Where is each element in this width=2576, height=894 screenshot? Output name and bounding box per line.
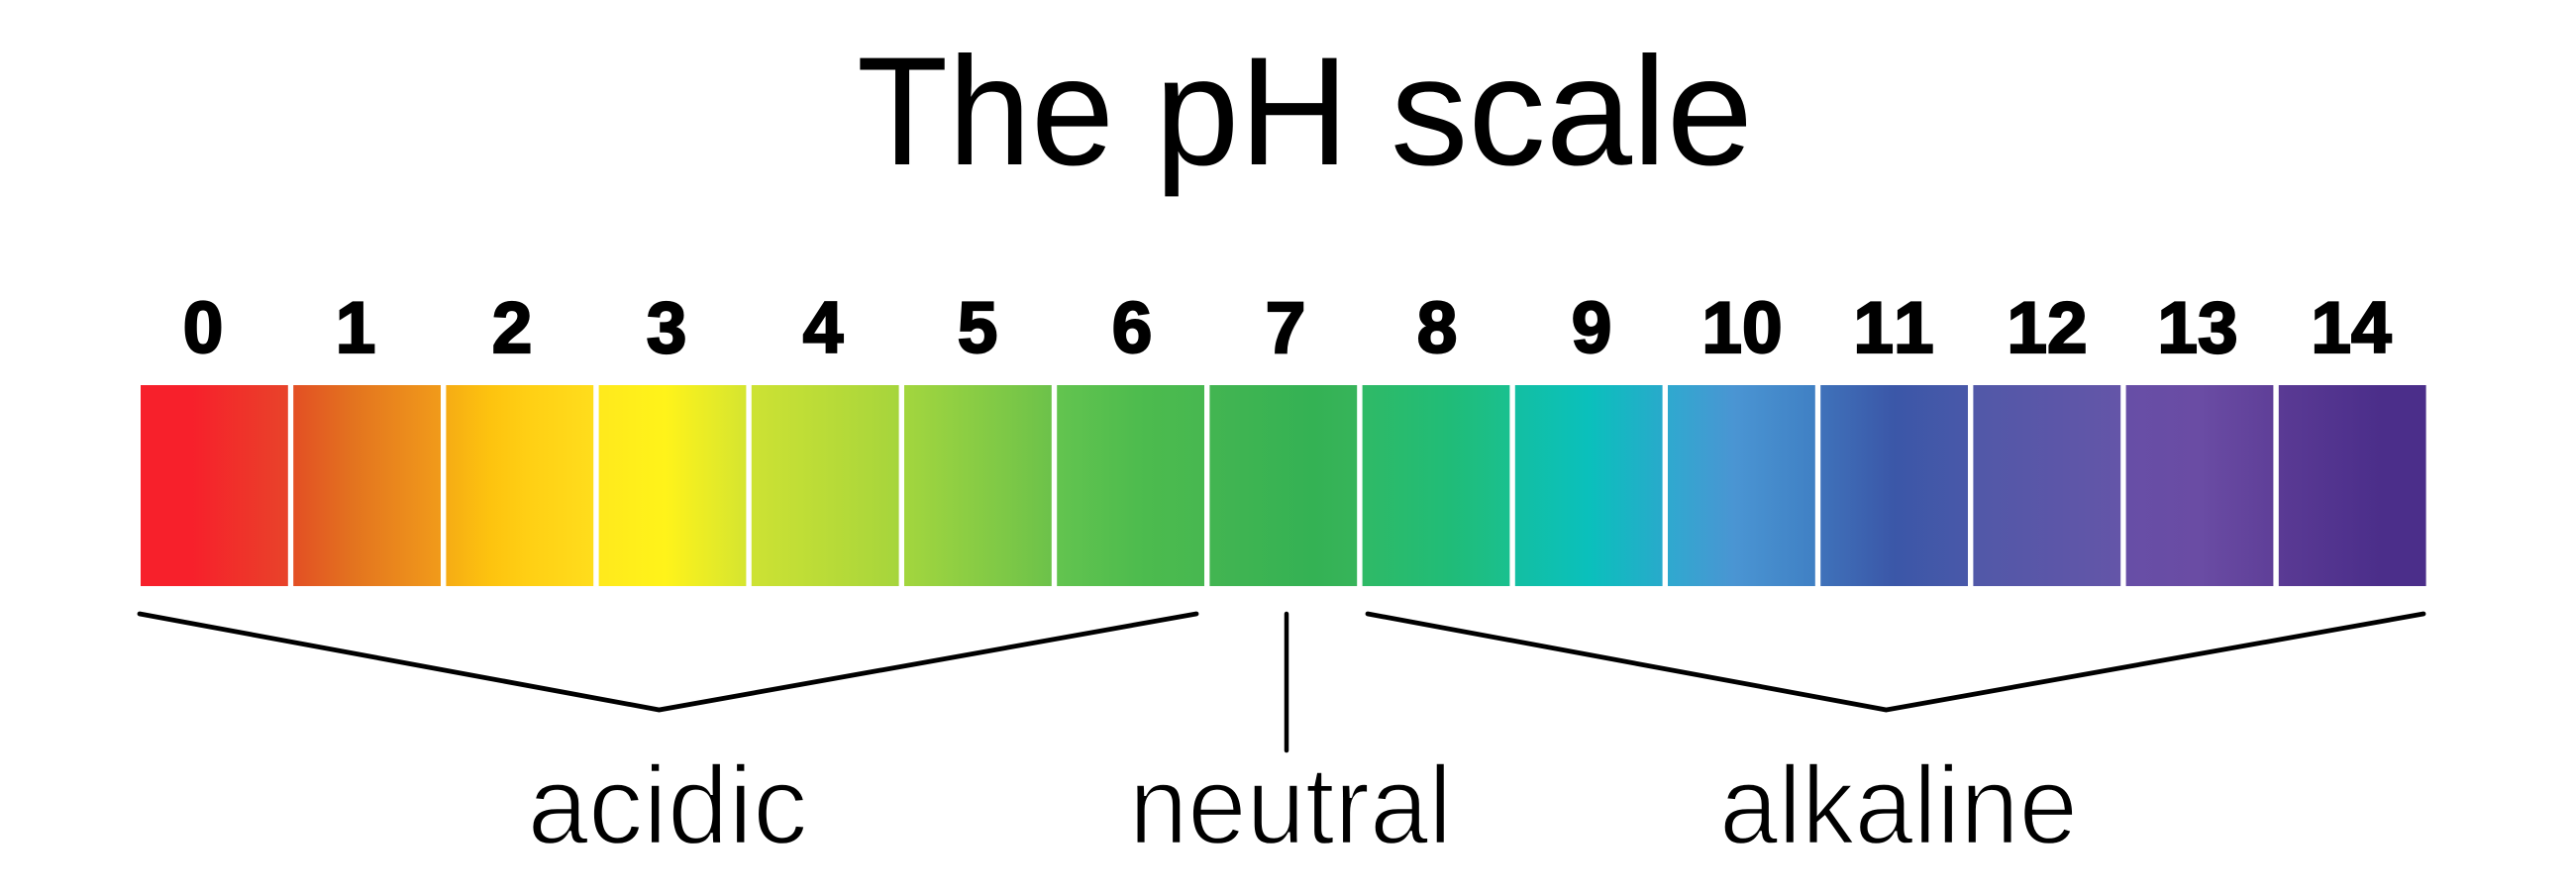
pH number labels: 10 xyxy=(1701,288,1783,368)
pH number labels: 3 xyxy=(647,288,686,368)
pH number labels: 4 xyxy=(803,288,844,368)
pH number labels: 11 xyxy=(1853,288,1934,368)
pH number labels: 0 xyxy=(183,288,223,368)
pH number labels: 1 xyxy=(336,288,375,368)
pH number labels: 2 xyxy=(492,288,532,368)
title: The xyxy=(857,26,1114,198)
pH number labels: 13 xyxy=(2157,288,2238,368)
pH number labels: 9 xyxy=(1572,288,1611,368)
pH number labels: 7 xyxy=(1266,288,1305,368)
title xyxy=(857,26,1753,198)
pH number labels: 8 xyxy=(1417,288,1457,368)
pH number labels: 5 xyxy=(958,288,997,368)
pH number labels: 12 xyxy=(2007,288,2088,368)
pH number labels xyxy=(183,288,2392,368)
title: scale xyxy=(1391,26,1753,198)
label: alkaline: alkaline xyxy=(1719,744,2078,867)
title: pH xyxy=(1155,26,1349,198)
alkaline bracket xyxy=(1368,614,2423,710)
pH number labels: 6 xyxy=(1112,288,1152,368)
label: neutral: neutral xyxy=(1129,744,1452,867)
pH number labels: 14 xyxy=(2311,288,2392,368)
neutral line xyxy=(1285,614,1288,750)
colour scale bar xyxy=(141,385,2426,586)
acidic bracket xyxy=(140,614,1196,710)
label: acidic: acidic xyxy=(527,744,808,867)
